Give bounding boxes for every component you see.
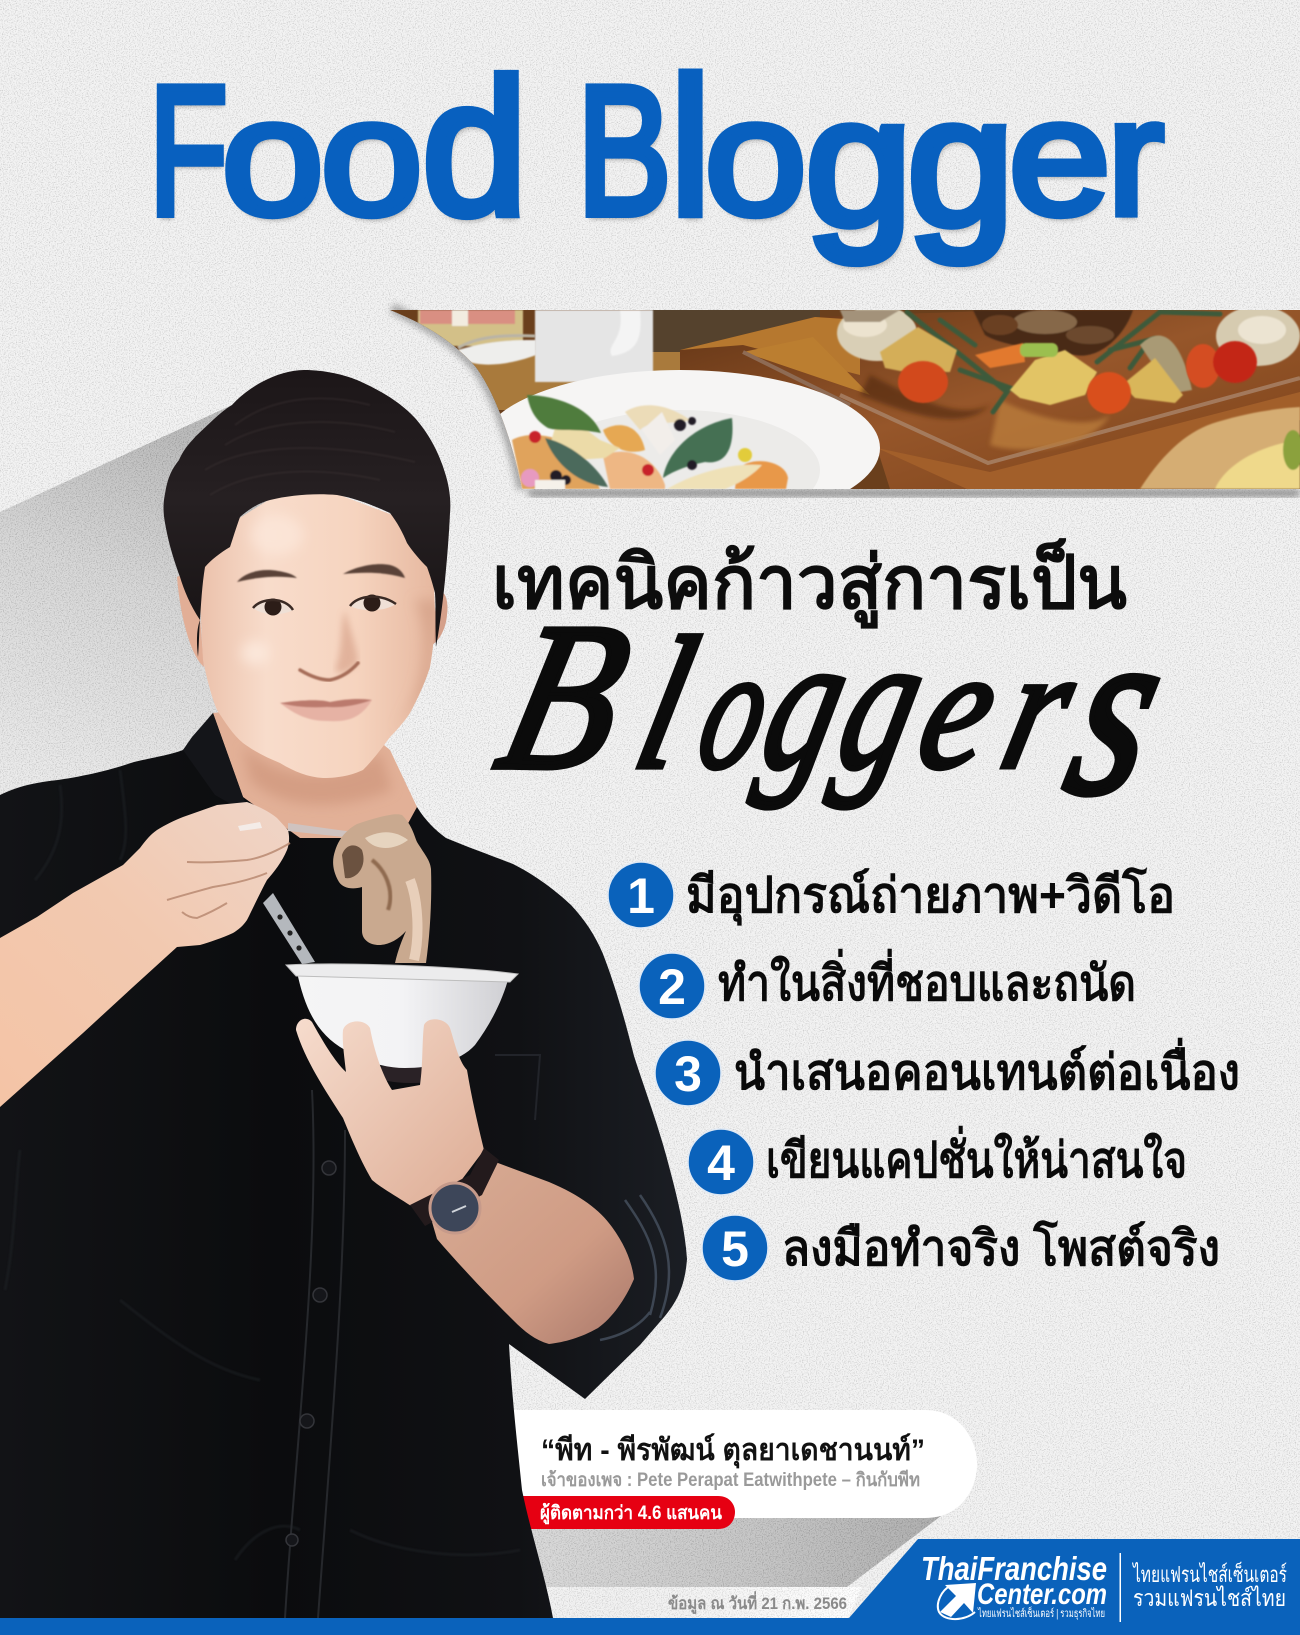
carrot: [975, 343, 1058, 368]
list of tips: [608, 862, 1240, 1281]
logo arrow icon: [938, 1583, 976, 1619]
logo divider: [1120, 1553, 1121, 1622]
page owner line: เจ้าของเพจ : Pete Perapat Eatwithpete – กินกับพีท: [541, 1469, 920, 1491]
shirt pocket: [495, 1055, 540, 1120]
tip 1: มีอุปกรณ์ถ่ายภาพ+วิดีโอ: [686, 866, 1175, 926]
hand holding bowl: [296, 1019, 484, 1222]
left ear: [177, 575, 204, 667]
tip 1: [608, 862, 1175, 928]
hair: [164, 370, 450, 657]
title: g: [906, 60, 1014, 264]
shirt buttons: [286, 1161, 336, 1546]
face highlights: [240, 518, 435, 706]
face: [200, 480, 435, 778]
logo tagline: ไทยแฟรนไชส์เซ็นเตอร์ | รวมธุรกิจไทย: [977, 1606, 1105, 1620]
tip 4: เขียนแคปชั่นให้น่าสนใจ: [766, 1125, 1187, 1188]
tip 5: 5: [721, 1221, 749, 1277]
eyes: [253, 594, 396, 616]
watch: [410, 1148, 499, 1233]
collar: [183, 713, 250, 815]
fork handle: [263, 893, 315, 964]
title: o: [222, 64, 324, 249]
tomatoes: [898, 341, 1257, 414]
tip 5: ลงมือทำจริง โพสต์จริง: [782, 1219, 1220, 1276]
neck: [213, 700, 417, 838]
noodles: [333, 814, 431, 963]
wooden board: [680, 300, 1300, 489]
large white plate: [500, 370, 880, 489]
rolled sleeve cuff detail: [600, 1195, 669, 1340]
name pill: [480, 1410, 977, 1518]
tip 2: ทำในสิ่งที่ชอบและถนัด: [718, 948, 1136, 1011]
hair sheen: [205, 398, 415, 495]
tip 3: 3: [674, 1046, 702, 1102]
date note: ข้อมูล ณ วันที่ 21 ก.พ. 2566: [668, 1591, 847, 1615]
mug: [535, 310, 653, 382]
fingernail: [238, 822, 262, 831]
shirt placket: [285, 1090, 345, 1618]
logo panel: [849, 1539, 1300, 1618]
title: o: [704, 64, 807, 249]
title: o: [320, 64, 423, 249]
food photo banner: [390, 310, 1300, 489]
forearm holding bowl: [430, 1160, 634, 1344]
followers text: ผู้ติดตามกว่า 4.6 แสนคน: [540, 1502, 722, 1525]
title: e: [1008, 64, 1111, 249]
rosemary sprigs: [907, 312, 1220, 412]
roasted meat: [973, 310, 1133, 356]
tip 2: 2: [658, 959, 686, 1015]
red followers pill: [480, 1496, 735, 1529]
spoon: [288, 823, 353, 838]
logo: [921, 1550, 1107, 1620]
cake and side plate: [418, 310, 536, 365]
plated food: [512, 395, 788, 489]
bread: [1140, 407, 1300, 489]
logo wordmark: ThaiFranchise: [921, 1550, 1107, 1587]
right ear: [432, 590, 448, 645]
date strip background: [540, 1587, 862, 1618]
finger creases: [167, 843, 290, 918]
eyebrows: [237, 564, 405, 582]
tip 3: นำเสนอคอนเทนต์ต่อเนื่อง: [734, 1037, 1240, 1100]
tip 4: 4: [707, 1135, 735, 1191]
mouth: [280, 699, 372, 721]
tip 2: [639, 948, 1136, 1019]
title: r: [1107, 64, 1164, 249]
person: [0, 370, 687, 1618]
person name: “พีท - พีรพัฒน์ ตุลยาเดชานนท์”: [541, 1433, 925, 1469]
title: g: [804, 60, 912, 264]
nose: [300, 610, 358, 680]
script word Bloggers: [470, 620, 1170, 835]
potatoes: [880, 327, 1192, 405]
tip 5: [702, 1215, 1220, 1281]
footer bar: [0, 1618, 1300, 1635]
pill shadow: [500, 1516, 941, 1587]
bark block: [650, 310, 820, 352]
subheading: เทคนิคก้าวสู่การเป็น: [492, 539, 1127, 629]
chin shadow on neck: [243, 745, 392, 805]
table: [390, 310, 1300, 490]
garlic bulbs: [837, 305, 1300, 366]
tip 3: [655, 1037, 1240, 1106]
forearm raised to mouth: [0, 802, 289, 1107]
logo domain: Center.com: [977, 1578, 1107, 1611]
shirt folds: [5, 770, 520, 1560]
tip 4: [688, 1125, 1187, 1195]
title: [140, 60, 1180, 275]
tip 1: 1: [627, 868, 655, 924]
background: folded paper shadow: [0, 400, 320, 820]
curve shadow of food panel: [392, 308, 522, 489]
food photo shadow: [526, 489, 1300, 497]
bowl: [286, 964, 518, 1083]
shirt: [0, 713, 687, 1618]
